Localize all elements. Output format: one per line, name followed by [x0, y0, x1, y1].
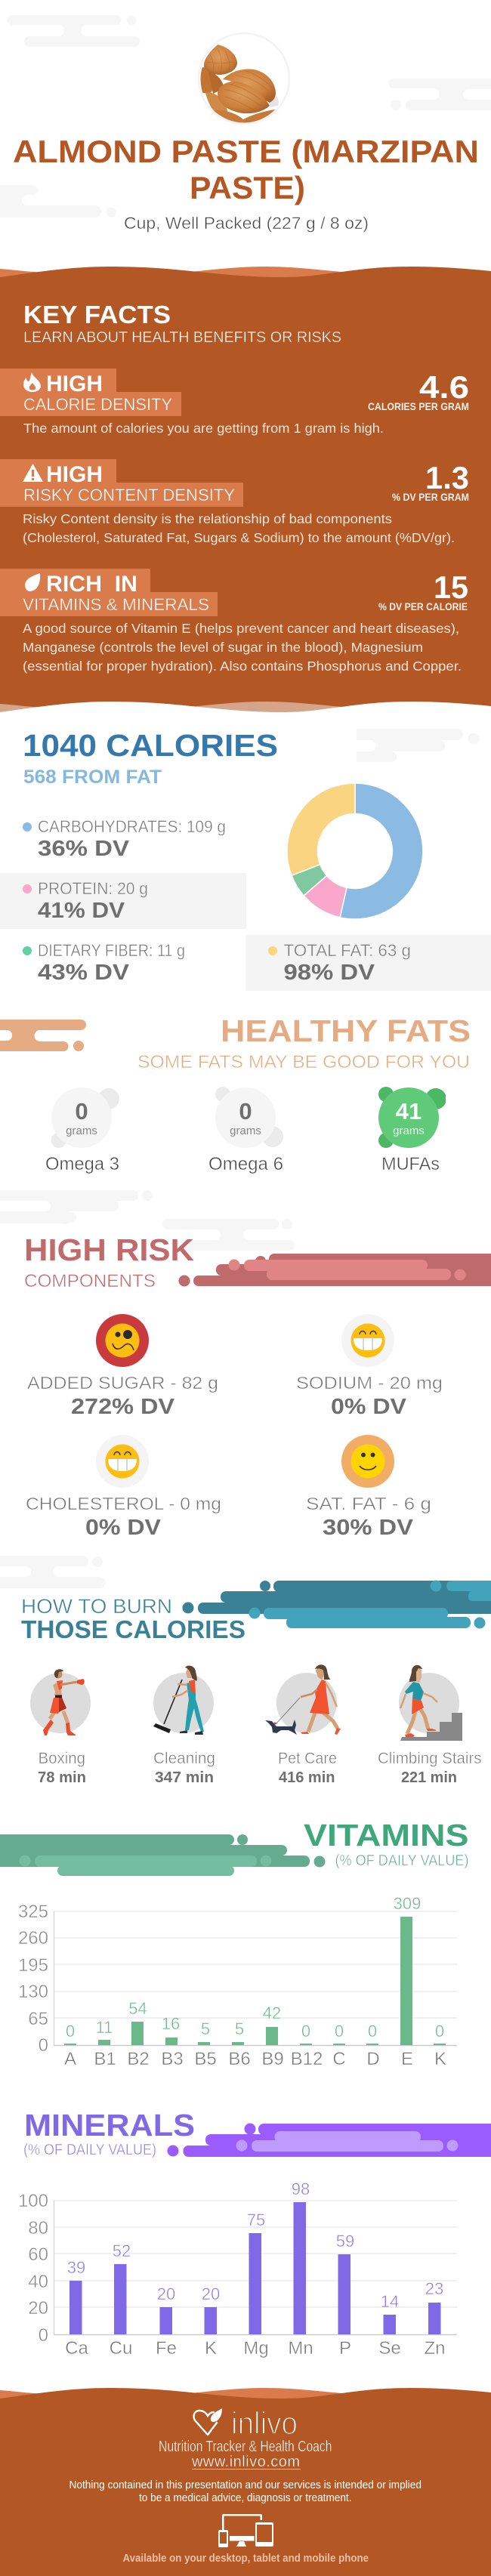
legend: protein: 41% DV: [38, 899, 125, 923]
decoration: vitamins cloud: [0, 1834, 325, 1876]
activity: boxing: 78 min: [38, 1769, 86, 1786]
icon: almonds in circle: [198, 33, 289, 128]
heading: vitamins: VITAMINS: [304, 1818, 468, 1853]
card: rich in vitamins and minerals: VITAMINS & MINERALS: [23, 595, 209, 614]
heading: calories: 1040 CALORIES: [23, 728, 278, 763]
disclaimer: [69, 2479, 422, 2504]
item: cholesterol: CHOLESTEROL - 0 mg: [26, 1494, 221, 1513]
item: saturated fat: [306, 1435, 431, 1540]
badge: omega 3: Omega 3: [45, 1154, 119, 1174]
card: rich in vitamins and minerals: % DV PER CALORIE: [378, 600, 468, 612]
card: rich in vitamins and minerals: A good source of Vitamin E (helps prevent cancer and heart diseases),: [23, 621, 459, 636]
bar chart: minerals: 52: [113, 2241, 131, 2260]
heading: healthy fats: HEALTHY FATS: [221, 1013, 471, 1048]
card: calorie density: CALORIES PER GRAM: [368, 400, 469, 412]
card: rich in vitamins and minerals: Manganese (controls the level of sugar in the blood), Magnesium: [23, 640, 423, 655]
activity: cleaning: [153, 1666, 215, 1786]
item: sodium: [296, 1314, 443, 1419]
item: sodium: SODIUM - 20 mg: [296, 1373, 443, 1393]
bar chart: minerals: 23: [425, 2279, 443, 2298]
badge: omega 3: 0: [75, 1098, 88, 1124]
heading: healthy fats: [137, 1013, 471, 1072]
bar chart: vitamins: B2: [127, 2049, 150, 2069]
bar chart: vitamins: [18, 1894, 457, 2069]
bar chart: minerals: 0: [39, 2325, 48, 2346]
heading: key facts: KEY FACTS: [23, 301, 171, 329]
bar chart: vitamins: 0: [66, 2022, 75, 2041]
bar chart: minerals: 59: [336, 2232, 354, 2251]
card: calorie density: The amount of calories you are getting from 1 gram is high.: [23, 421, 384, 436]
card: risky content density: (Cholesterol, Saturated Fat, Sugars & Sodium) to the amount (%DV/gr).: [23, 530, 455, 545]
item: saturated fat: SAT. FAT - 6 g: [306, 1494, 431, 1513]
decoration: teal cloud: [183, 1580, 491, 1628]
activity: pet care: 416 min: [279, 1769, 335, 1786]
bar chart: vitamins: 54: [128, 1999, 147, 2018]
bar chart: vitamins: 325: [18, 1902, 48, 1922]
item: added sugar: ADDED SUGAR - 82 g: [27, 1373, 218, 1393]
bar chart: minerals: 14: [381, 2292, 399, 2311]
card: risky content density: Risky Content density is the relationship of bad components: [23, 511, 392, 526]
card: rich in vitamins and minerals: (essential for proper hydration). Also contains Phosphorus and Copper.: [23, 659, 462, 674]
heading: key facts: [23, 301, 341, 346]
heading: vitamins: (% OF DAILY VALUE): [335, 1853, 468, 1869]
decoration: healthy fats cloud: [0, 1020, 86, 1051]
panel: footer: [0, 2388, 491, 2576]
bar chart: minerals: Zn: [424, 2338, 446, 2359]
bar chart: vitamins: 65: [28, 2009, 48, 2029]
bar chart: vitamins: 11: [96, 2018, 113, 2037]
item: saturated fat: 30% DV: [323, 1516, 414, 1540]
card: risky content density: 1.3: [425, 460, 469, 495]
badge: omega 6: 0: [239, 1098, 252, 1124]
bar chart: minerals: 60: [28, 2244, 48, 2265]
badge: MUFAs: MUFAs: [381, 1154, 440, 1174]
bar chart: vitamins: 0: [435, 2022, 444, 2041]
icon: person walking dog: [265, 1664, 341, 1735]
logo: inlivo: inlivo: [231, 2405, 298, 2441]
badge: omega 6: grams: [230, 1124, 261, 1137]
subtitle: serving size: Cup, Well Packed (227 g / 8 oz): [124, 214, 369, 233]
heading: how to burn: [21, 1595, 246, 1643]
card: rich in vitamins and minerals: RICH IN: [46, 572, 137, 597]
logo: inlivo: [194, 2405, 298, 2441]
bar chart: vitamins: B12: [291, 2049, 323, 2069]
activity: boxing: [30, 1669, 91, 1786]
card: risky content density: [0, 459, 469, 545]
card: calorie density: [0, 369, 469, 436]
badge: MUFAs: [378, 1087, 446, 1174]
bar chart: minerals: Fe: [156, 2338, 177, 2359]
bar chart: minerals: K: [205, 2338, 217, 2359]
bar chart: minerals: Ca: [65, 2338, 88, 2359]
disclaimer: Nothing contained in this presentation and our services is intended or implied: [69, 2479, 422, 2491]
item: sodium: 0% DV: [331, 1395, 407, 1419]
bar chart: vitamins: 130: [18, 1982, 48, 2002]
activity: climbing stairs: [378, 1665, 482, 1786]
item: cholesterol: [26, 1435, 221, 1540]
icon: boxer: [43, 1669, 85, 1735]
bar chart: vitamins: 0: [301, 2022, 310, 2041]
bar chart: vitamins: 0: [39, 2035, 48, 2056]
activity: cleaning: 347 min: [155, 1769, 214, 1786]
heading: minerals: MINERALS: [24, 2108, 195, 2143]
bar chart: vitamins: B3: [161, 2049, 184, 2069]
bar chart: vitamins: 195: [18, 1955, 48, 1976]
legend: protein: [0, 873, 246, 929]
bar chart: minerals: 98: [292, 2180, 310, 2198]
badge: omega 3: [45, 1087, 119, 1174]
legend: protein: PROTEIN: 20 g: [38, 879, 148, 898]
bar chart: vitamins: 5: [201, 2019, 210, 2038]
icon: smiling face: [360, 1453, 376, 1470]
title: [13, 134, 479, 205]
decoration: high risk cloud: [178, 1254, 491, 1287]
card: risky content density: % DV PER GRAM: [392, 491, 469, 503]
item: cholesterol: 0% DV: [85, 1516, 162, 1540]
title: ALMOND PASTE (MARZIPAN: [13, 134, 479, 169]
icon: devices: [218, 2514, 273, 2547]
card: rich in vitamins and minerals: 15: [434, 569, 468, 605]
activity: pet care: [265, 1664, 341, 1786]
heading: minerals: (% OF DAILY VALUE): [23, 2142, 156, 2158]
activity: climbing stairs: 221 min: [401, 1769, 457, 1786]
legend: dietary fiber: DIETARY FIBER: 11 g: [38, 941, 185, 960]
heading: high risk: HIGH RISK: [24, 1232, 194, 1267]
icon: person climbing stairs: [400, 1665, 462, 1741]
bar chart: vitamins: K: [434, 2049, 446, 2069]
bar chart: minerals: 20: [157, 2284, 175, 2303]
link: website: www.inlivo.com: [191, 2454, 300, 2470]
bar chart: minerals: 40: [28, 2272, 48, 2292]
badge: omega 6: [208, 1087, 283, 1174]
bar chart: minerals: P: [339, 2338, 351, 2359]
panel: footer: Available on your desktop, tablet and mobile phone: [122, 2552, 369, 2565]
icon: leaf: [25, 573, 40, 591]
bar chart: vitamins: 5: [235, 2019, 244, 2038]
card: rich in vitamins and minerals: [0, 569, 468, 674]
card: calorie density: HIGH: [46, 372, 103, 396]
legend: total fat: 98% DV: [284, 961, 375, 985]
legend: carbohydrates: [23, 817, 226, 861]
bar chart: vitamins: B6: [228, 2049, 251, 2069]
heading: key facts: LEARN ABOUT HEALTH BENEFITS OR RISKS: [23, 329, 341, 346]
bar chart: minerals: 20: [28, 2298, 48, 2318]
icon: flame: [23, 372, 41, 392]
heading: minerals: [23, 2108, 195, 2158]
bar chart: vitamins: C: [332, 2049, 346, 2069]
bar chart: minerals: Mn: [288, 2338, 313, 2359]
heading: how to burn: HOW TO BURN: [21, 1595, 172, 1618]
title: PASTE): [190, 170, 305, 205]
badge: omega 6: Omega 6: [208, 1154, 283, 1174]
heading: high risk: COMPONENTS: [24, 1271, 156, 1291]
icon: person sweeping: [153, 1666, 204, 1735]
item: added sugar: 272% DV: [71, 1395, 175, 1419]
legend: total fat: [246, 935, 491, 991]
decoration: minerals cloud: [168, 2124, 491, 2157]
heading: vitamins: [304, 1818, 468, 1869]
legend: carbohydrates: CARBOHYDRATES: 109 g: [38, 817, 226, 836]
bar chart: vitamins: 42: [263, 2004, 281, 2022]
icon: grinning face: [354, 1331, 382, 1350]
activity: climbing stairs: Climbing Stairs: [378, 1750, 482, 1767]
bar chart: vitamins: E: [401, 2049, 413, 2069]
bar chart: minerals: 20: [202, 2284, 220, 2303]
legend: total fat: TOTAL FAT: 63 g: [284, 941, 411, 960]
bar chart: vitamins: 0: [368, 2022, 377, 2041]
bar chart: minerals: 80: [28, 2218, 48, 2238]
bar chart: minerals: 39: [67, 2258, 85, 2277]
bar chart: minerals: [18, 2180, 457, 2359]
bar chart: vitamins: D: [366, 2049, 380, 2069]
heading: calories: [23, 728, 278, 788]
bar chart: vitamins: 260: [18, 1928, 48, 1948]
disclaimer: to be a medical advice, diagnosis or treatment.: [139, 2491, 352, 2504]
badge: MUFAs: grams: [393, 1124, 425, 1137]
card: risky content density: HIGH: [46, 462, 103, 487]
bar chart: minerals: 100: [18, 2191, 48, 2211]
bar chart: vitamins: B9: [261, 2049, 284, 2069]
bar chart: minerals: Mg: [243, 2338, 269, 2359]
legend: dietary fiber: [23, 941, 185, 985]
bar chart: vitamins: A: [64, 2049, 76, 2069]
panel: footer: Nutrition Tracker & Health Coach: [159, 2439, 332, 2455]
card: risky content density: RISKY CONTENT DENSITY: [23, 486, 235, 504]
bar chart: vitamins: 309: [394, 1894, 421, 1913]
heading: how to burn: THOSE CALORIES: [21, 1615, 246, 1643]
card: calorie density: 4.6: [419, 369, 469, 405]
icon: sick face: [113, 1330, 134, 1350]
panel: key facts: [0, 267, 491, 722]
badge: MUFAs: 41: [396, 1098, 422, 1124]
bar chart: vitamins: B5: [194, 2049, 217, 2069]
bar chart: vitamins: 16: [162, 2014, 180, 2033]
icon: grinning face: [108, 1452, 137, 1471]
badge: omega 3: grams: [66, 1124, 97, 1137]
legend: carbohydrates: 36% DV: [38, 837, 130, 861]
bar chart: vitamins: B1: [94, 2049, 116, 2069]
card: calorie density: CALORIE DENSITY: [23, 395, 172, 414]
bar chart: vitamins: 0: [335, 2022, 344, 2041]
activity: cleaning: Cleaning: [153, 1750, 215, 1767]
donut chart: [287, 783, 423, 919]
activity: boxing: Boxing: [38, 1750, 85, 1767]
item: added sugar: [27, 1314, 218, 1419]
legend: dietary fiber: 43% DV: [38, 961, 130, 985]
bar chart: minerals: Se: [378, 2338, 401, 2359]
heading: healthy fats: SOME FATS MAY BE GOOD FOR YOU: [137, 1052, 470, 1072]
bar chart: minerals: 75: [247, 2210, 265, 2229]
heading: high risk: [24, 1232, 194, 1291]
bar chart: minerals: Cu: [110, 2338, 132, 2359]
icon: warning triangle: [23, 464, 43, 482]
heading: calories: 568 FROM FAT: [23, 767, 162, 788]
activity: pet care: Pet Care: [278, 1750, 337, 1767]
